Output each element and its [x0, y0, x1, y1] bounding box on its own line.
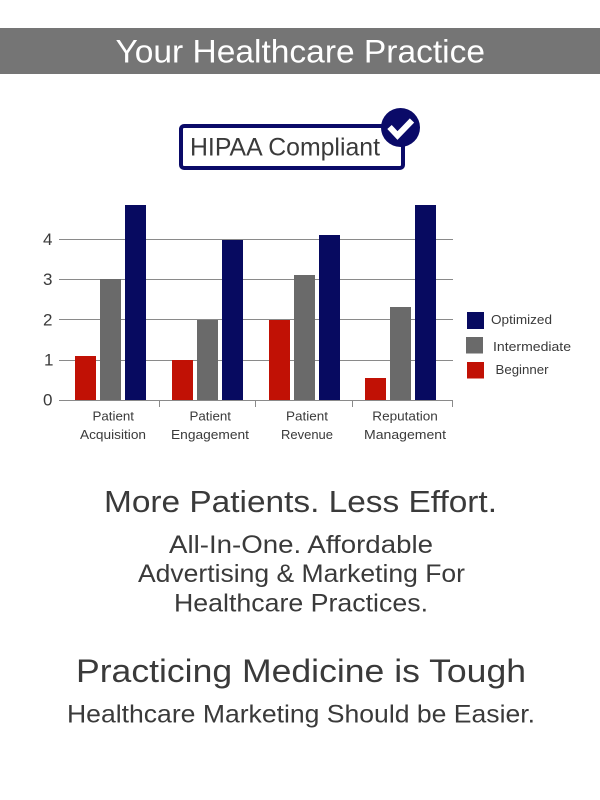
text block: all-in-one: Healthcare Practices.: [174, 590, 428, 618]
y-axis labels: 1: [44, 350, 53, 370]
y-axis labels: 4: [43, 230, 52, 249]
text block: all-in-one: [138, 531, 465, 618]
x-axis labels: Patient: [92, 408, 134, 424]
bars: reputation management: [365, 205, 436, 400]
bars: patient acquisition: [75, 205, 146, 400]
y-axis labels: 0: [43, 390, 52, 410]
text block: all-in-one: Advertising & Marketing For: [138, 560, 465, 588]
x-axis labels: Patient: [286, 408, 328, 424]
x-axis labels: [80, 408, 446, 442]
x-axis labels: Reputation: [372, 408, 438, 424]
badge: HIPAA compliant: HIPAA Compliant: [190, 134, 380, 162]
text block: healthcare marketing: Healthcare Marketing Should be Easier.: [67, 701, 535, 729]
legend: Intermediate: [493, 339, 571, 354]
y-axis labels: [43, 230, 53, 410]
bars: patient revenue: [269, 235, 340, 400]
title banner: [0, 28, 600, 74]
legend: Beginner: [496, 362, 549, 377]
y-axis labels: 3: [43, 270, 52, 289]
bars: patient engagement: [172, 240, 243, 400]
legend: Optimized: [491, 312, 552, 327]
x-axis labels: Management: [364, 427, 446, 442]
x-axis labels: Engagement: [171, 427, 249, 442]
y-axis labels: 2: [43, 310, 52, 330]
x-axis labels: Patient: [190, 408, 231, 424]
x-axis labels: Revenue: [281, 427, 333, 442]
badge: HIPAA compliant: [181, 108, 420, 168]
heading: more patients: More Patients. Less Effort.: [104, 484, 497, 519]
legend: [466, 312, 571, 378]
bar chart: [43, 205, 453, 442]
title banner: Your Healthcare Practice: [116, 34, 485, 70]
heading: practicing medicine: Practicing Medicine is Tough: [76, 653, 526, 689]
text block: all-in-one: All-In-One. Affordable: [169, 531, 433, 559]
x-axis labels: Acquisition: [80, 427, 146, 442]
chart gridlines and axis: [59, 240, 453, 407]
